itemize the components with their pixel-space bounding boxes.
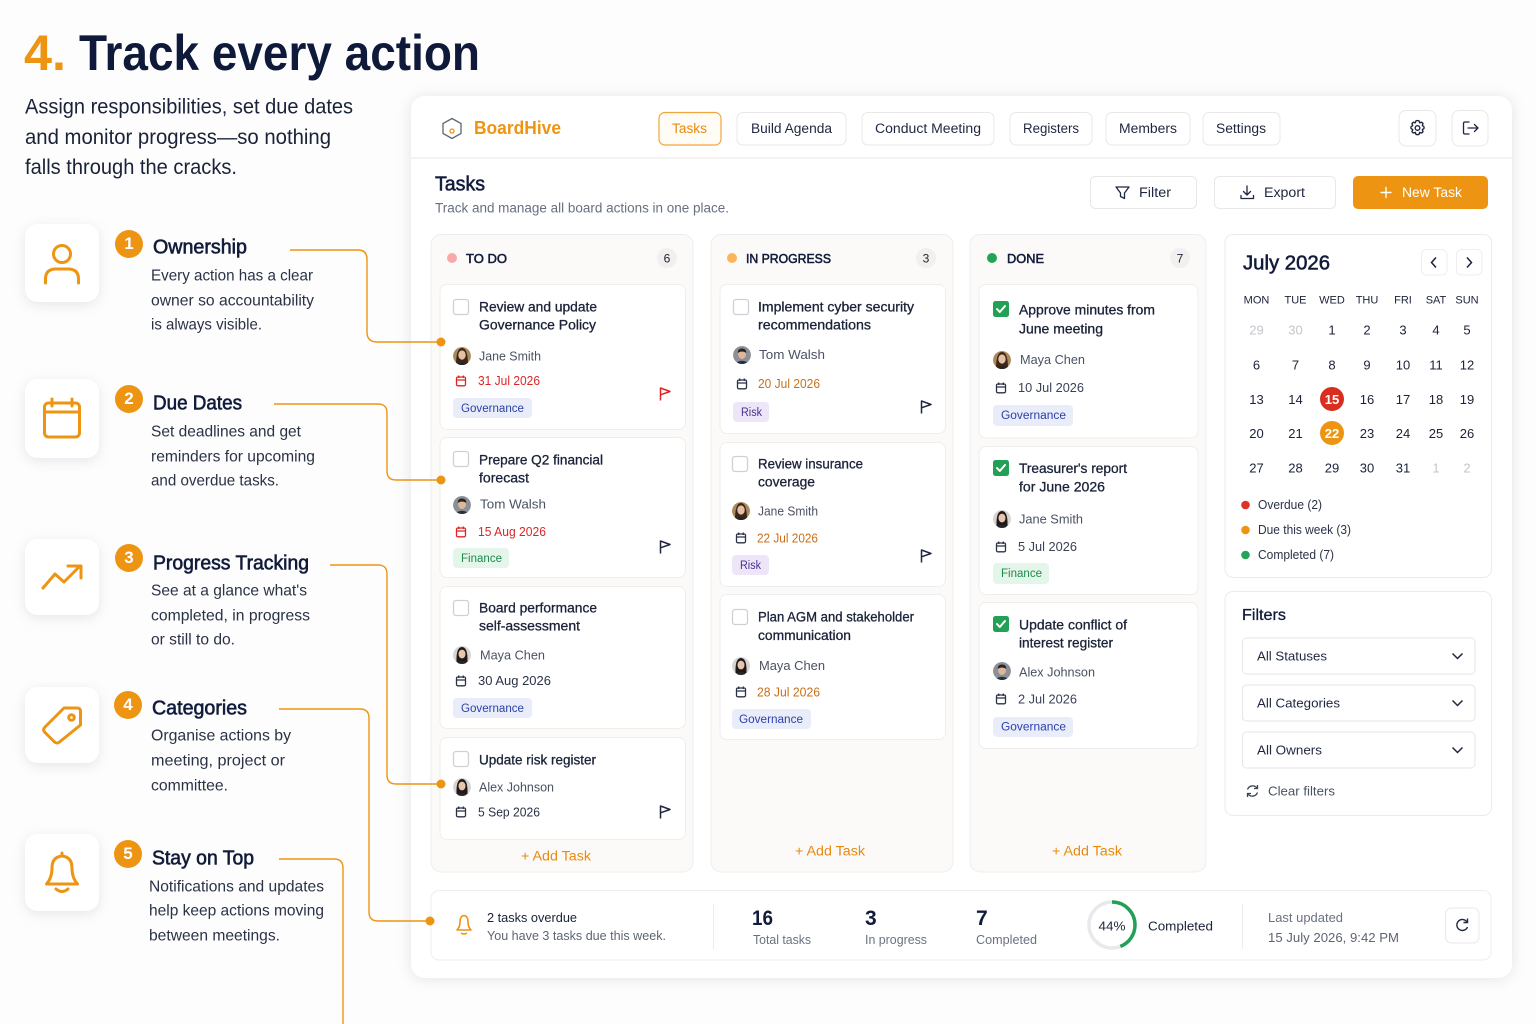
- date grid: 30: [1360, 460, 1374, 476]
- task card: agm communication: Maya Chen: [759, 658, 825, 673]
- description: [151, 268, 314, 334]
- icon button: gear: [1399, 110, 1436, 146]
- number badge 3: [115, 544, 143, 572]
- intro text: [25, 96, 353, 179]
- legend: Overdue (2): [1258, 498, 1322, 512]
- task card: q2 financial forecast: forecast: [479, 470, 529, 486]
- task card: board self-assessment: Maya Chen: [480, 648, 545, 662]
- overdue message: 2 tasks overdue: [487, 911, 577, 925]
- weekday headers: TUE: [1284, 294, 1306, 306]
- button: new task: [1353, 176, 1488, 209]
- column header: [447, 248, 677, 268]
- overdue message: You have 3 tasks due this week.: [487, 929, 666, 943]
- nav: members: Members: [1119, 121, 1177, 136]
- highlighted dates: [1320, 387, 1344, 445]
- task card: update risk register: 5 Sep 2026: [478, 806, 540, 820]
- heading: Due Dates: [153, 392, 242, 414]
- icon: person: [25, 224, 99, 302]
- icon: bell: [457, 916, 471, 934]
- connector: categories: [279, 709, 434, 926]
- weekday headers: MON: [1244, 294, 1269, 306]
- date grid: 18: [1429, 392, 1443, 407]
- connector: ownership: [290, 250, 446, 346]
- number badge 4: [114, 691, 142, 719]
- description: owner so accountability: [151, 292, 314, 310]
- date grid: 29: [1325, 460, 1339, 476]
- date grid: 19: [1460, 392, 1474, 407]
- last updated: 15 July 2026, 9:42 PM: [1268, 931, 1399, 945]
- feature: categories: [25, 687, 291, 794]
- column: in progress: [711, 234, 953, 872]
- nav: settings: Settings: [1216, 121, 1266, 136]
- date grid: 9: [1363, 358, 1371, 372]
- date grid: 28: [1288, 460, 1303, 476]
- legend: Due this week (3): [1258, 523, 1351, 537]
- nav: conduct meeting: [862, 112, 994, 145]
- select: categories: All Categories: [1257, 696, 1341, 710]
- description: [151, 582, 310, 648]
- title: Track every action: [79, 25, 480, 81]
- clear filters: Clear filters: [1268, 784, 1335, 798]
- column header: TO DO: [466, 251, 507, 266]
- filters heading: Filters: [1242, 607, 1286, 624]
- add task: + Add Task: [521, 848, 591, 864]
- task card: cyber security: Implement cyber security: [758, 300, 914, 314]
- feature: stay on top: [25, 834, 324, 944]
- feature: progress tracking: [25, 539, 310, 648]
- connector: due dates: [274, 404, 446, 484]
- task card: conflict of interest: Alex Johnson: [1019, 664, 1095, 680]
- date grid: 7: [1292, 358, 1299, 372]
- legend: Completed (7): [1258, 548, 1334, 562]
- nav: settings: [1203, 112, 1280, 145]
- column header: 3: [923, 252, 930, 266]
- task card: cyber security: Tom Walsh: [759, 347, 825, 362]
- description: meeting, project or: [151, 752, 286, 770]
- description: committee.: [151, 778, 228, 794]
- task card: treasurer's report: [979, 446, 1198, 594]
- date grid: 21: [1288, 426, 1303, 441]
- number badge 2: [115, 385, 143, 413]
- date grid: 25: [1429, 426, 1443, 441]
- panel: app window: [411, 96, 1512, 978]
- nav: registers: [1010, 112, 1092, 145]
- refresh button: [1446, 908, 1479, 943]
- completed label: Completed: [1148, 918, 1213, 934]
- date grid: 11: [1429, 358, 1443, 372]
- date grid: 27: [1249, 460, 1264, 476]
- stat: total tasks: [752, 907, 811, 947]
- description: is always visible.: [151, 316, 262, 334]
- date grid: 14: [1288, 392, 1303, 407]
- heading: Categories: [152, 698, 247, 720]
- date grid: 26: [1460, 426, 1474, 441]
- progress ring: [1089, 902, 1135, 948]
- date grid: 2: [1463, 460, 1471, 476]
- description: or still to do.: [151, 632, 235, 648]
- description: and overdue tasks.: [151, 472, 279, 490]
- number badge 5: 5: [123, 844, 133, 863]
- description: Notifications and updates: [149, 878, 324, 896]
- date grid: 20: [1249, 426, 1264, 441]
- task card: cyber security: recommendations: [758, 318, 871, 332]
- date grid: 4: [1432, 322, 1440, 338]
- page heading: Track and manage all board actions in one place.: [435, 200, 729, 216]
- number badge 4: 4: [123, 695, 133, 714]
- task card: q2 financial forecast: 15 Aug 2026: [478, 525, 546, 539]
- select: owners: [1242, 732, 1475, 768]
- icon button: logout: [1452, 110, 1488, 146]
- date grid: 10: [1396, 358, 1410, 372]
- column header: 7: [1177, 252, 1184, 266]
- panel: summary bar: [431, 890, 1491, 960]
- legend: [1241, 498, 1351, 562]
- column header: DONE: [1007, 251, 1044, 266]
- task card: q2 financial forecast: Prepare Q2 financial: [479, 452, 603, 468]
- stat: total tasks: 16: [752, 907, 773, 930]
- icon: calendar: [25, 379, 99, 458]
- task card: conflict of interest: 2 Jul 2026: [1018, 692, 1077, 706]
- month navigation: [1422, 250, 1482, 275]
- heading: Progress Tracking: [153, 552, 309, 574]
- button: new task: New Task: [1402, 185, 1462, 200]
- column header: [727, 248, 936, 268]
- task card: board self-assessment: self-assessment: [479, 618, 580, 634]
- add task: + Add Task: [795, 844, 865, 858]
- connector: stay on top: [279, 859, 343, 1024]
- title: 4.: [24, 25, 66, 81]
- task card: treasurer's report: Finance: [1001, 568, 1042, 580]
- nav: registers: Registers: [1023, 121, 1079, 136]
- number badge 1: 1: [124, 234, 134, 253]
- task card: update risk register: [440, 738, 686, 840]
- task card: q2 financial forecast: Finance: [461, 553, 502, 565]
- task card: cyber security: Risk: [741, 407, 762, 419]
- date grid: 3: [1399, 322, 1407, 338]
- task card: review governance policy: 31 Jul 2026: [478, 374, 540, 388]
- date grid: 5: [1463, 322, 1471, 338]
- icon: tag: [25, 687, 99, 763]
- stat: completed: [976, 907, 1037, 947]
- date grid: 16: [1360, 392, 1374, 407]
- column header: 6: [664, 252, 671, 266]
- task card: agm communication: 28 Jul 2026: [757, 686, 820, 700]
- task card: insurance coverage: Risk: [740, 560, 761, 572]
- heading: Stay on Top: [152, 848, 254, 870]
- task card: update risk register: Alex Johnson: [479, 780, 554, 794]
- task card: conflict of interest: Update conflict of: [1019, 618, 1127, 632]
- date grid: 17: [1396, 392, 1410, 407]
- date grid: 6: [1253, 358, 1260, 372]
- progress ring: 44%: [1098, 918, 1126, 934]
- task card: board self-assessment: 30 Aug 2026: [478, 674, 551, 688]
- task card: treasurer's report: Treasurer's report: [1019, 461, 1127, 476]
- last updated: Last updated: [1268, 911, 1343, 925]
- description: [151, 424, 315, 490]
- number badge 5: [114, 840, 142, 868]
- date grid: 2: [1363, 322, 1371, 338]
- task card: q2 financial forecast: Tom Walsh: [480, 496, 546, 512]
- task card: approve minutes: June meeting: [1019, 322, 1103, 336]
- task card: insurance coverage: [720, 442, 946, 586]
- app header: [443, 110, 1488, 146]
- task card: approve minutes: 10 Jul 2026: [1018, 381, 1084, 395]
- stat: in progress: 3: [865, 907, 877, 930]
- task card: agm communication: [720, 594, 946, 740]
- task card: review governance policy: Governance Policy: [479, 318, 596, 332]
- add task: + Add Task: [1052, 844, 1122, 858]
- description: Organise actions by: [151, 728, 291, 744]
- date grid: 29: [1249, 322, 1264, 338]
- task card: cyber security: 20 Jul 2026: [758, 377, 820, 391]
- stat: completed: Completed: [976, 933, 1037, 947]
- task card: agm communication: communication: [758, 628, 851, 643]
- button: export: Export: [1264, 185, 1305, 200]
- task card: update risk register: Update risk register: [479, 752, 597, 768]
- weekday headers: [1244, 294, 1479, 306]
- description: [149, 878, 324, 944]
- select: statuses: [1242, 638, 1475, 674]
- date grid: [1249, 322, 1474, 476]
- connector: progress tracking: [330, 565, 446, 788]
- stat: in progress: [865, 907, 927, 947]
- nav: build agenda: Build Agenda: [751, 121, 832, 136]
- select: categories: [1242, 685, 1475, 721]
- nav: build agenda: [737, 112, 846, 145]
- stat: in progress: In progress: [865, 933, 927, 947]
- nav: conduct meeting: Conduct Meeting: [875, 121, 981, 136]
- description: Every action has a clear: [151, 268, 314, 284]
- icon: bell: [25, 834, 99, 911]
- date grid: 1: [1328, 322, 1336, 338]
- intro text: and monitor progress—so nothing: [25, 126, 331, 149]
- task card: board self-assessment: [440, 586, 686, 728]
- weekday headers: FRI: [1394, 294, 1412, 306]
- nav: tasks active: [659, 112, 721, 145]
- overdue message: [487, 911, 666, 943]
- task card: approve minutes: Maya Chen: [1020, 352, 1085, 367]
- description: [151, 728, 291, 794]
- task card: insurance coverage: Review insurance: [758, 456, 863, 472]
- button: filter: Filter: [1139, 185, 1172, 200]
- task card: cyber security: [720, 284, 946, 434]
- panel: calendar: [1225, 234, 1492, 578]
- task card: q2 financial forecast: [440, 438, 686, 578]
- panel: filters: [1225, 592, 1492, 816]
- date grid: 12: [1460, 358, 1474, 372]
- task card: approve minutes: Approve minutes from: [1019, 302, 1155, 318]
- date grid: 30: [1288, 322, 1303, 338]
- weekday headers: SAT: [1426, 294, 1447, 306]
- task card: review governance policy: Governance: [461, 403, 524, 415]
- date grid: 15: [1325, 392, 1339, 407]
- task card: agm communication: Governance: [739, 714, 803, 726]
- stat: completed: 7: [976, 907, 988, 930]
- date grid: 23: [1360, 426, 1374, 441]
- button: filter: [1090, 176, 1196, 208]
- date grid: 24: [1396, 426, 1410, 441]
- nav: tasks active: Tasks: [672, 121, 707, 136]
- task card: review governance policy: Jane Smith: [479, 348, 541, 364]
- task card: board self-assessment: Governance: [461, 703, 524, 715]
- feature: ownership: [25, 224, 314, 334]
- number badge 1: [115, 230, 143, 258]
- column header: IN PROGRESS: [746, 251, 831, 266]
- stat: total tasks: Total tasks: [753, 933, 811, 947]
- description: completed, in progress: [151, 608, 310, 624]
- date grid: 13: [1249, 392, 1264, 407]
- task card: insurance coverage: coverage: [758, 474, 815, 490]
- last updated: [1268, 911, 1399, 945]
- column: done: [970, 234, 1206, 872]
- column: to do: [431, 234, 693, 872]
- task card: treasurer's report: Jane Smith: [1019, 512, 1083, 526]
- task card: treasurer's report: 5 Jul 2026: [1018, 540, 1077, 554]
- task card: agm communication: Plan AGM and stakeholder: [758, 610, 914, 624]
- number badge 2: 2: [124, 389, 134, 408]
- task card: conflict of interest: [979, 602, 1198, 748]
- description: See at a glance what's: [151, 582, 307, 600]
- icon: trend arrow: [25, 539, 99, 615]
- logo: BoardHive: [474, 118, 561, 138]
- task card: board self-assessment: Board performance: [479, 600, 597, 616]
- task card: insurance coverage: Jane Smith: [758, 504, 818, 518]
- nav: members: [1106, 112, 1190, 145]
- task card: conflict of interest: interest register: [1019, 636, 1113, 650]
- task card: approve minutes: [979, 284, 1198, 438]
- page heading: Tasks: [435, 174, 485, 196]
- task card: review governance policy: [440, 284, 686, 430]
- task card: review governance policy: Review and update: [479, 300, 597, 314]
- heading: Ownership: [153, 236, 247, 258]
- task card: treasurer's report: for June 2026: [1019, 480, 1105, 494]
- task card: conflict of interest: Governance: [1001, 722, 1066, 734]
- intro text: falls through the cracks.: [25, 156, 237, 179]
- task card: approve minutes: Governance: [1001, 410, 1066, 422]
- page heading: [435, 174, 729, 216]
- column header: [987, 248, 1190, 268]
- task card: insurance coverage: 22 Jul 2026: [757, 532, 818, 546]
- feature: due dates: [25, 379, 315, 490]
- date grid: 8: [1328, 358, 1336, 372]
- date grid: 31: [1396, 460, 1410, 476]
- weekday headers: THU: [1356, 294, 1378, 306]
- select: owners: All Owners: [1257, 742, 1323, 758]
- weekday headers: SUN: [1455, 294, 1479, 306]
- month title: July 2026: [1243, 252, 1330, 274]
- description: between meetings.: [149, 928, 280, 944]
- date grid: 22: [1325, 426, 1339, 441]
- date grid: 1: [1432, 460, 1440, 476]
- weekday headers: WED: [1319, 294, 1345, 306]
- select: statuses: All Statuses: [1257, 648, 1327, 664]
- description: Set deadlines and get: [151, 424, 302, 440]
- number badge 3: 3: [124, 548, 134, 567]
- description: help keep actions moving: [149, 902, 324, 920]
- button: export: [1214, 176, 1336, 208]
- intro text: Assign responsibilities, set due dates: [25, 96, 353, 118]
- description: reminders for upcoming: [151, 448, 315, 466]
